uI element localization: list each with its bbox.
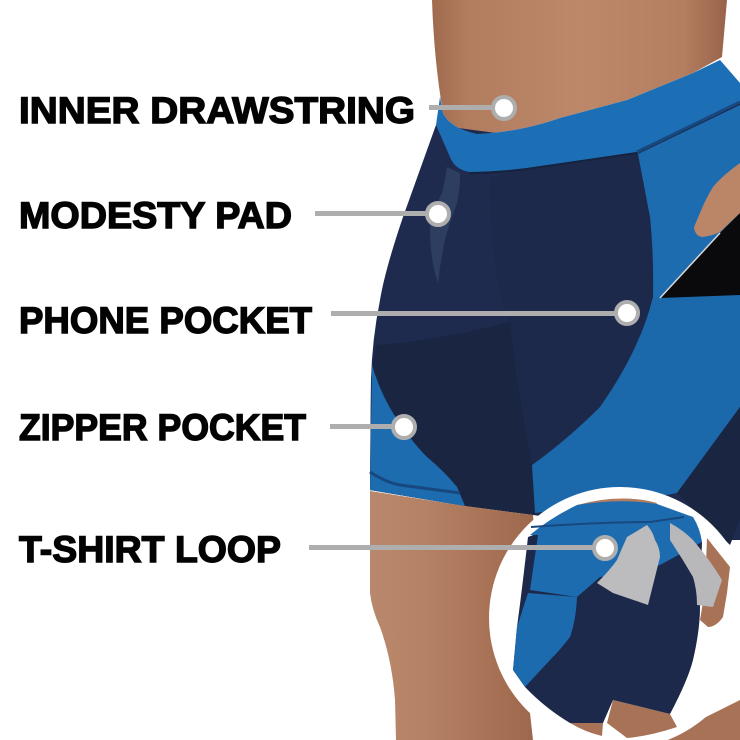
- inset: waistband and side blue: [530, 501, 702, 597]
- label: modesty pad: [19, 194, 449, 236]
- inset: lower back skin: [577, 498, 657, 515]
- modesty pad panel: [430, 167, 460, 283]
- phone in pocket: [660, 213, 740, 298]
- label: phone pocket: PHONE POCKET: [19, 299, 312, 341]
- label: phone pocket: [19, 299, 638, 341]
- label: inner drawstring: INNER DRAWSTRING: [19, 89, 415, 131]
- label: t-shirt loop: [19, 528, 616, 570]
- inset: leg skin: [607, 700, 677, 738]
- hand: [694, 163, 740, 237]
- thigh panel: [370, 365, 465, 506]
- label: zipper pocket: ZIPPER POCKET: [19, 406, 306, 448]
- navy lower side: [677, 407, 740, 545]
- inset: hand: [700, 538, 730, 627]
- inset: lower blue panel: [513, 593, 577, 687]
- label: t-shirt loop: T-SHIRT LOOP: [19, 528, 281, 570]
- shorts: navy base: [370, 100, 740, 540]
- shorts: front shading: [490, 152, 653, 465]
- waistband: [436, 60, 740, 172]
- shorts: blue panels: [370, 60, 740, 545]
- waistband stitching: [637, 102, 740, 152]
- model torso: [432, 0, 727, 134]
- thigh: [370, 491, 540, 740]
- hem stitching: [370, 472, 460, 493]
- inset: right towel end: [670, 523, 722, 607]
- circular inset: back view: [489, 487, 740, 740]
- shorts: darker inner leg: [370, 322, 535, 515]
- side panel: [638, 105, 740, 300]
- inset: left towel end: [597, 525, 660, 605]
- lower right leg: [660, 700, 740, 740]
- inset: shorts navy: [513, 520, 702, 723]
- hip panel: [532, 295, 740, 513]
- label: modesty pad: MODESTY PAD: [19, 194, 292, 236]
